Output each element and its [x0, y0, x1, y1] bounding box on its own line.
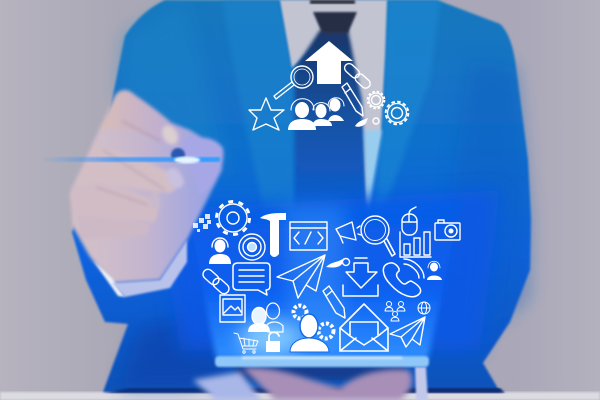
left lower suit shade	[120, 300, 232, 388]
tablet	[215, 356, 429, 367]
suit jacket	[72, 0, 531, 392]
icon: chain link	[343, 62, 372, 90]
table strip	[0, 392, 600, 400]
icon: image frame	[220, 295, 245, 322]
icon: two people	[248, 303, 283, 332]
icon: signal arcs	[404, 259, 424, 278]
icon: pencil	[323, 286, 345, 318]
projection glow	[160, 190, 500, 350]
tie	[295, 30, 366, 230]
projection beam	[188, 200, 462, 358]
jacket cuff band	[112, 240, 187, 297]
lower shadow under tablet	[235, 364, 405, 380]
right lapel	[372, 0, 440, 240]
icon: phone	[383, 263, 421, 297]
icon: chat bubble	[233, 263, 270, 295]
icon: megaphone	[336, 222, 361, 243]
thumb	[180, 137, 223, 196]
icon: magnifier	[361, 216, 395, 256]
paper sheet	[193, 372, 262, 400]
icon: star	[249, 98, 284, 130]
icon: large gear	[386, 102, 408, 124]
icon: globe	[418, 302, 430, 314]
icon: magnifier	[274, 66, 313, 99]
icon: pencil	[342, 83, 363, 116]
icon: code window	[290, 222, 327, 250]
palm	[70, 100, 223, 283]
icon: headset person	[209, 238, 231, 264]
icon: camera	[435, 220, 460, 240]
suit lower shadow	[105, 388, 505, 393]
collar shadow	[310, 0, 355, 4]
icon: wrench	[355, 118, 379, 127]
shirt cuff	[93, 260, 125, 297]
beam highlight	[285, 205, 345, 350]
icon: small gear	[368, 92, 384, 108]
hand	[70, 90, 223, 283]
icon: wrench	[326, 258, 350, 268]
tie knot	[313, 12, 357, 33]
icon: padlock	[266, 332, 280, 352]
index finger	[100, 90, 182, 148]
icon: person with gears	[290, 306, 334, 352]
ring finger	[72, 183, 160, 222]
icon: cart	[234, 333, 258, 353]
icon: download tray	[343, 258, 378, 296]
lower hand under tablet	[243, 368, 412, 400]
icon group: lower house body	[193, 202, 460, 353]
icon: gear	[216, 202, 250, 234]
icon: support team	[288, 98, 344, 130]
icon: bar chart	[400, 232, 431, 257]
stylus tip	[171, 148, 185, 162]
creases	[96, 121, 165, 205]
left upper sleeve shade	[120, 0, 230, 180]
icon: blocks	[193, 214, 211, 232]
shirt lower light strip	[363, 130, 382, 215]
icon group: upper house roof	[249, 41, 408, 130]
icon: headset person small	[427, 261, 442, 280]
icon: chain link	[201, 267, 231, 296]
icon: mouse	[402, 207, 417, 235]
icon: target	[239, 234, 265, 260]
icon: open envelope	[340, 304, 388, 351]
icon: paper plane	[277, 255, 325, 298]
icon: small paper plane	[390, 317, 425, 347]
middle finger	[78, 146, 185, 193]
left lapel	[222, 0, 295, 230]
icon: hammer	[260, 213, 286, 257]
nails	[159, 123, 181, 147]
light spot behind lock	[238, 320, 302, 356]
light flare	[40, 156, 220, 164]
icon: up arrow	[305, 41, 353, 84]
icon: network people	[385, 302, 405, 321]
right sleeve shade	[450, 60, 530, 340]
shirt	[280, 0, 387, 205]
lower cuff	[415, 367, 428, 400]
pinky finger	[75, 215, 150, 240]
